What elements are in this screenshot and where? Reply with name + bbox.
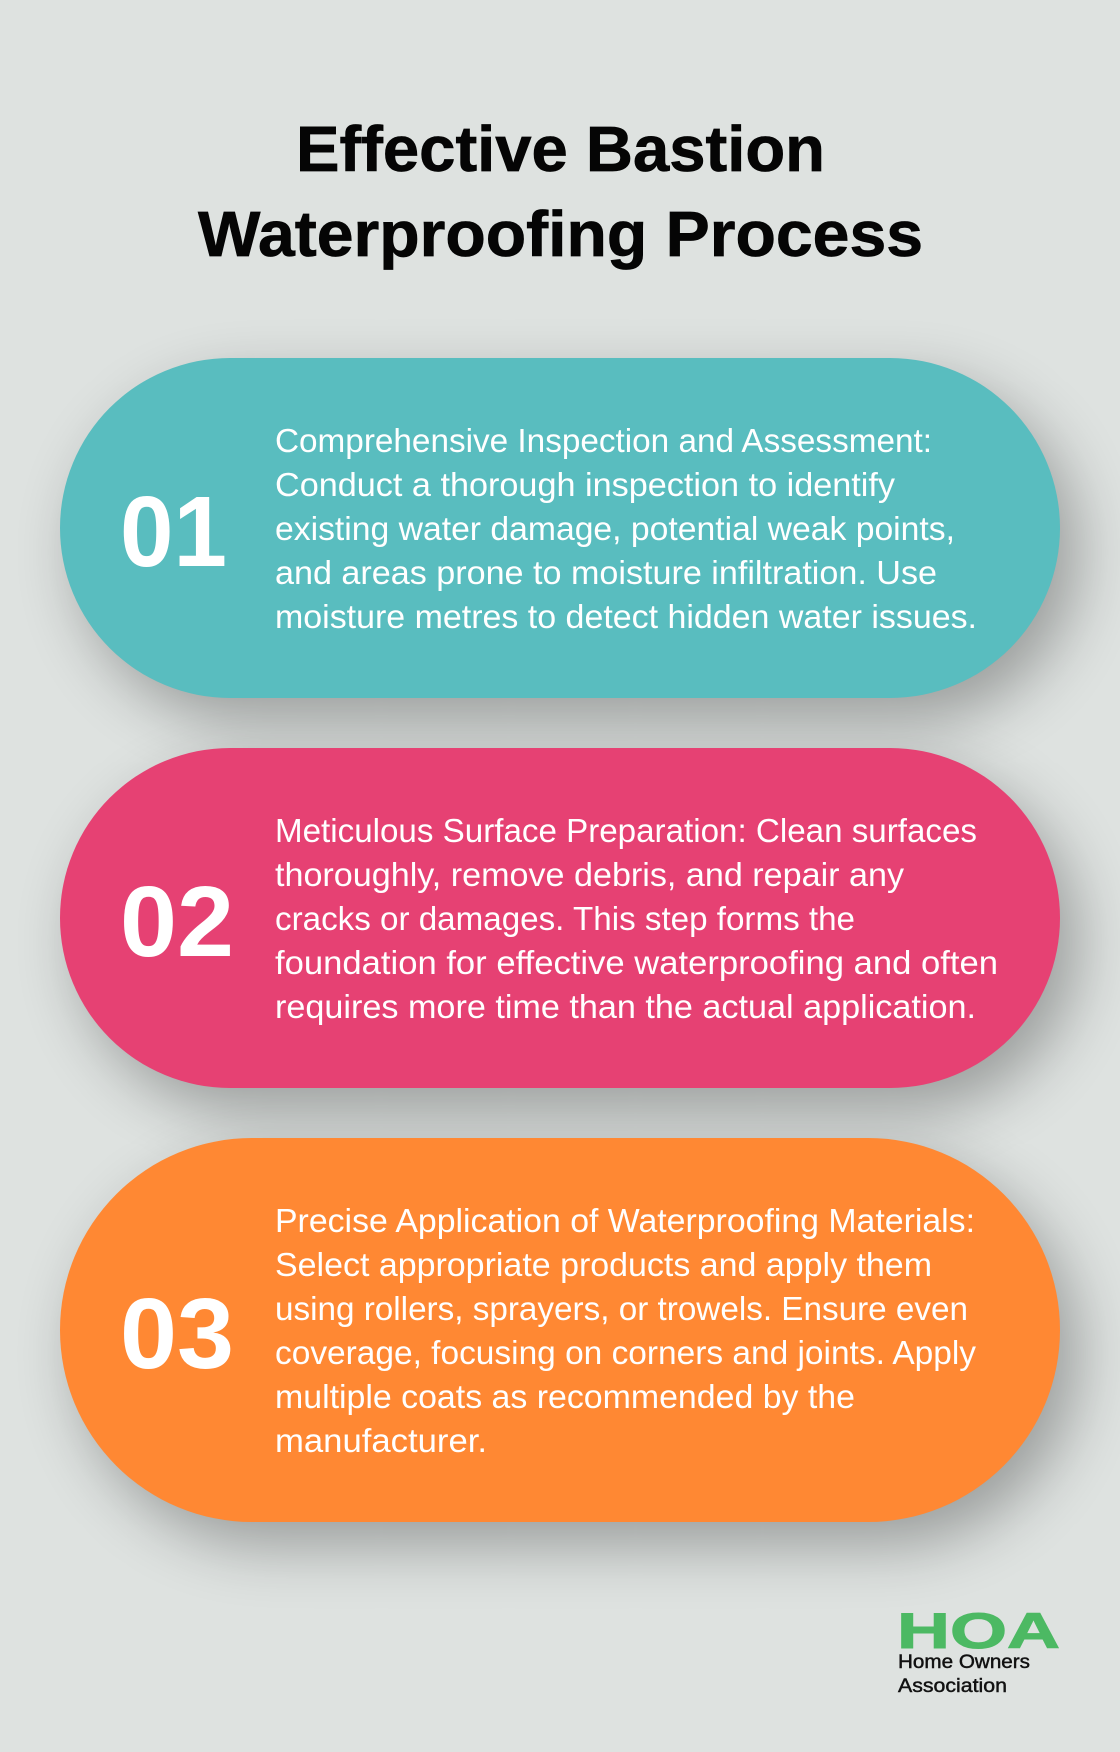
text block: step 01 description: moisture metres to detect hidden water issues. bbox=[275, 598, 977, 635]
text block: step 02 description: thoroughly, remove debris, and repair any bbox=[275, 856, 905, 893]
text block: step 03 description: manufacturer. bbox=[275, 1422, 487, 1459]
text block: step 03 description bbox=[275, 1202, 976, 1459]
text block: step 01 description: existing water damage, potential weak points, bbox=[275, 510, 955, 547]
text block: step 02 description: Meticulous Surface Preparation: Clean surfaces bbox=[275, 812, 977, 849]
logo: Home Owners Association bbox=[897, 1603, 1060, 1697]
panel: step 02 surface preparation bbox=[60, 748, 1060, 1088]
text block: step 01 description: and areas prone to moisture infiltration. Use bbox=[275, 554, 937, 591]
title bbox=[198, 113, 923, 270]
text block: step 02 description bbox=[275, 812, 998, 1025]
text block: step 01 description: Conduct a thorough inspection to identify bbox=[275, 466, 896, 503]
logo name line 2: Association bbox=[898, 1676, 1007, 1697]
text block: step 03 description: using rollers, sprayers, or trowels. Ensure even bbox=[275, 1290, 968, 1327]
title: Effective Bastion bbox=[296, 113, 825, 185]
logo name line 1: Home Owners bbox=[898, 1652, 1030, 1673]
text block: step 03 description: Select appropriate products and apply them bbox=[275, 1246, 932, 1283]
title: Waterproofing Process bbox=[198, 198, 923, 270]
panel: step 01 inspection bbox=[60, 358, 1060, 698]
text block: step 02 description: foundation for effective waterproofing and often bbox=[275, 944, 998, 981]
text block: step 01 description bbox=[275, 422, 977, 635]
panel: step 03 application bbox=[60, 1138, 1060, 1522]
step number 01: 01 bbox=[120, 476, 227, 588]
text block: step 03 description: multiple coats as recommended by the bbox=[275, 1378, 855, 1415]
logo mark HOA: HOA bbox=[897, 1603, 1060, 1659]
text block: step 03 description: coverage, focusing on corners and joints. Apply bbox=[275, 1334, 976, 1371]
text block: step 02 description: requires more time than the actual application. bbox=[275, 988, 976, 1025]
text block: step 02 description: cracks or damages. This step forms the bbox=[275, 900, 855, 937]
text block: step 01 description: Comprehensive Inspection and Assessment: bbox=[275, 422, 932, 459]
step number 03: 03 bbox=[120, 1278, 234, 1390]
text block: step 03 description: Precise Application of Waterproofing Materials: bbox=[275, 1202, 975, 1239]
step number 02: 02 bbox=[120, 866, 234, 978]
